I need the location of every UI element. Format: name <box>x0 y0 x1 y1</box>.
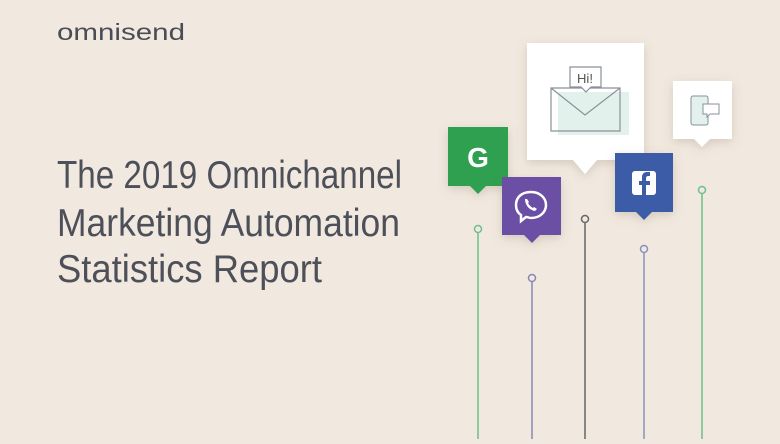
icon: email: Hi! <box>577 71 593 86</box>
icon: viber <box>502 177 561 243</box>
title: Statistics Report <box>57 248 322 291</box>
logo: omnisend <box>57 19 185 45</box>
title: Marketing Automation <box>57 202 400 245</box>
title <box>57 154 402 291</box>
icon: facebook <box>615 153 673 220</box>
stems <box>474 186 706 439</box>
icon: phone <box>673 81 732 147</box>
icon: email <box>527 43 644 174</box>
icon: google <box>448 127 508 194</box>
title: The 2019 Omnichannel <box>57 154 402 197</box>
icon: google: G <box>467 142 489 173</box>
